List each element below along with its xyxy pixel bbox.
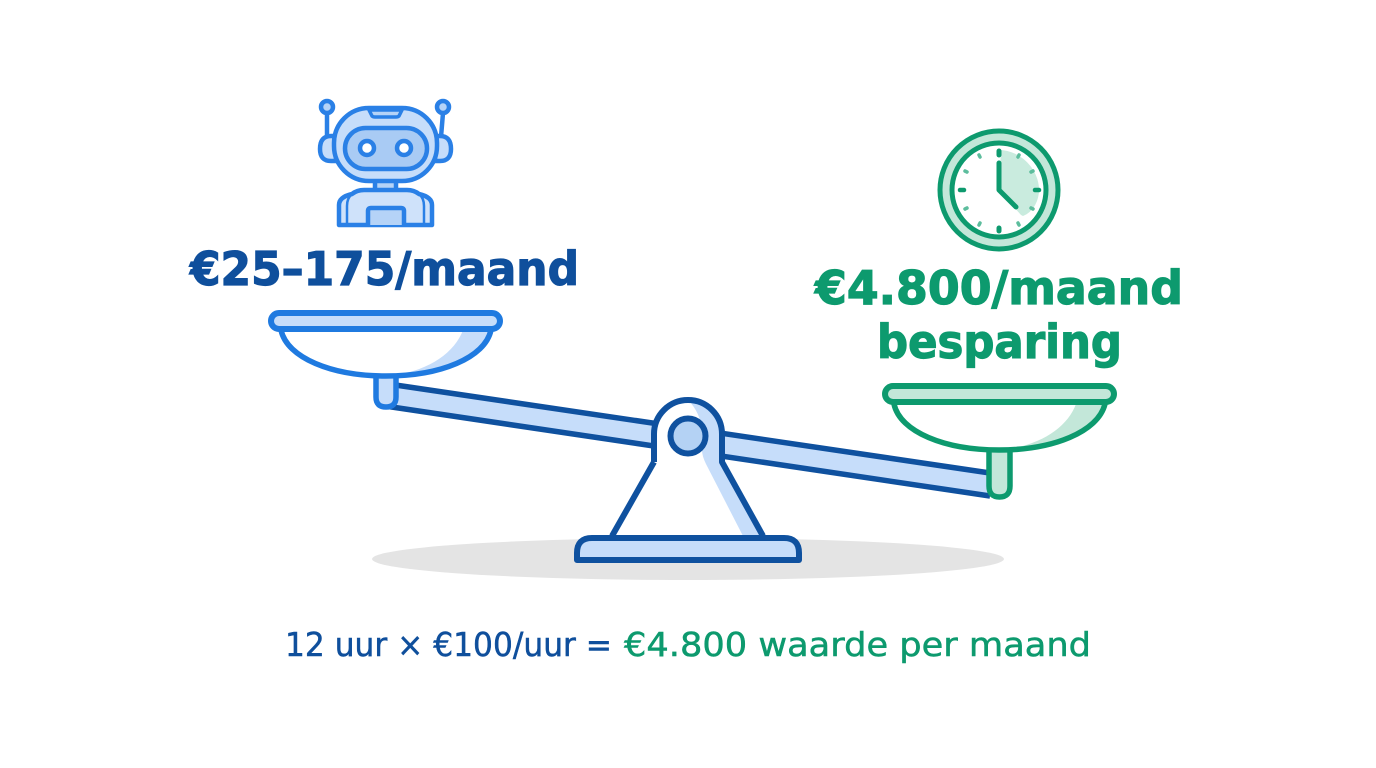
body xyxy=(339,190,432,225)
formula line: €4.800 waarde per maand xyxy=(624,625,1091,664)
right pan xyxy=(885,386,1114,497)
right pan rim xyxy=(885,386,1114,402)
left pan stem xyxy=(376,375,396,407)
right pan stem xyxy=(989,449,1010,497)
stand body xyxy=(612,400,763,536)
scale stand xyxy=(577,400,799,560)
right savings label: €4.800/maand xyxy=(814,261,1183,315)
clock face xyxy=(940,131,1058,249)
left pan rim xyxy=(271,313,500,329)
right savings label: besparing xyxy=(877,315,1122,369)
icon: clock xyxy=(940,131,1058,249)
seesaw beam xyxy=(385,383,990,497)
antennas xyxy=(321,101,449,137)
left pan xyxy=(271,313,500,407)
pivot circle xyxy=(670,418,706,454)
formula line: 12 uur × €100/uur = xyxy=(285,625,612,664)
chest panel xyxy=(368,208,404,225)
elapsed wedge xyxy=(999,150,1039,216)
right pan bowl xyxy=(894,404,1105,450)
formula line xyxy=(285,625,1091,664)
head xyxy=(334,108,437,181)
eyes xyxy=(360,141,374,155)
left pan bowl xyxy=(281,330,491,376)
stand base xyxy=(577,538,799,560)
icon: robot xyxy=(320,101,451,225)
ground shadow xyxy=(372,538,1004,580)
clock hands xyxy=(999,163,1016,207)
visor xyxy=(345,128,427,169)
brow xyxy=(369,110,402,117)
hour ticks xyxy=(960,151,1039,231)
neck xyxy=(375,179,396,192)
left price label: €25–175/maand xyxy=(189,242,579,296)
ears xyxy=(320,136,451,161)
right savings label xyxy=(814,261,1183,369)
